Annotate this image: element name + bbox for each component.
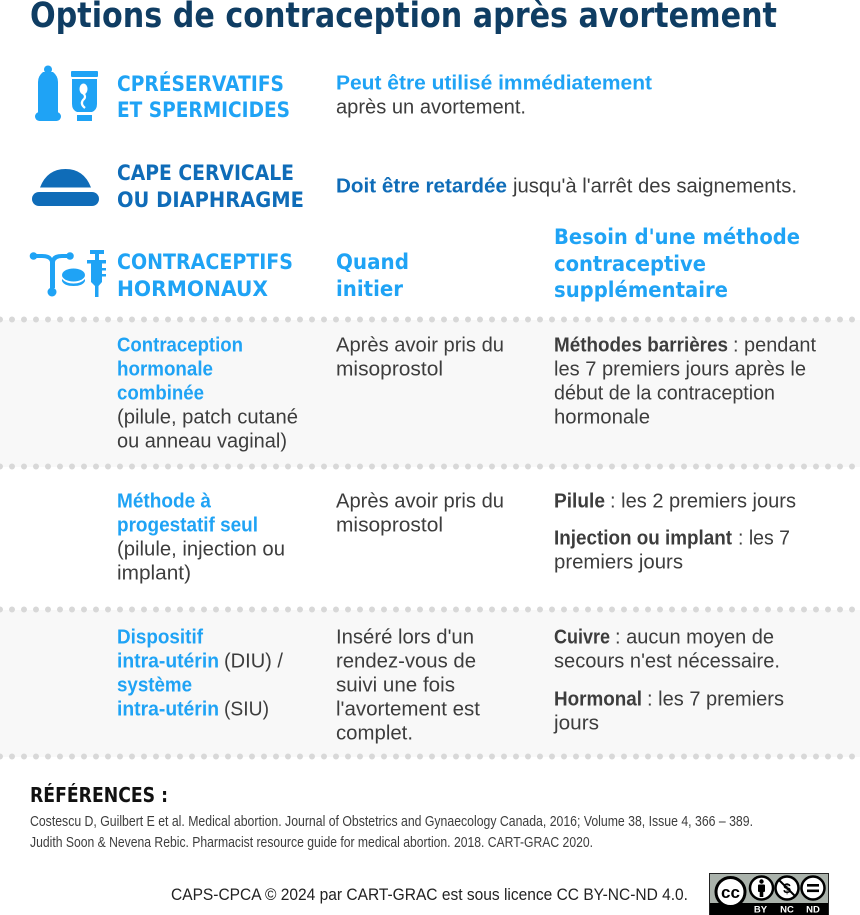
backup method <box>554 334 816 428</box>
when to start: misoprostol <box>336 358 443 380</box>
method name: hormonale <box>117 358 213 380</box>
when to start: Après avoir pris du <box>336 334 504 356</box>
backup method: premiers jours <box>554 552 683 574</box>
heading: hormonal contraceptives <box>117 250 293 302</box>
references list: Judith Soon & Nevena Rebic. Pharmacist resource guide for medical abortion. 2018. CART-GRAC 2020. <box>30 835 593 851</box>
column heading: when to start: Quand <box>336 250 409 275</box>
backup method <box>553 626 784 734</box>
backup method <box>554 490 796 574</box>
license text: CAPS-CPCA © 2024 par CART-GRAC est sous licence CC BY-NC-ND 4.0. <box>171 886 688 904</box>
when to start: rendez-vous de <box>336 650 476 672</box>
column heading: when to start <box>336 250 409 302</box>
backup method: jours <box>553 712 599 734</box>
method name: combinée <box>117 382 204 404</box>
when to start: misoprostol <box>336 514 443 536</box>
backup method: : pendant <box>733 334 816 356</box>
method name <box>117 626 283 720</box>
backup method: Pilule <box>554 490 605 512</box>
column heading: when to start: initier <box>336 277 403 302</box>
heading: hormonal contraceptives: CONTRACEPTIFS <box>117 250 293 275</box>
column heading: backup method: Besoin d'une méthode <box>554 225 800 250</box>
method name: ou anneau vaginal) <box>117 430 287 452</box>
heading: hormonal contraceptives: HORMONAUX <box>117 277 268 302</box>
when to start: complet. <box>336 722 413 744</box>
heading: condoms and spermicides: CPRÉSERVATIFS <box>117 71 284 97</box>
method name: intra-utérin <box>117 650 219 672</box>
column heading: backup method: contraceptive <box>554 252 706 277</box>
method name: implant) <box>117 562 191 584</box>
text: condoms timing <box>336 72 652 118</box>
text: cap timing: Doit être retardée <box>336 176 507 198</box>
backup method: hormonale <box>554 406 650 428</box>
backup method: Hormonal <box>554 688 642 710</box>
method name: (DIU) / <box>224 650 283 672</box>
backup method: début de la contraception <box>554 382 775 404</box>
method name: progestatif seul <box>117 514 258 536</box>
method name: Dispositif <box>117 626 203 648</box>
heading: cervical cap or diaphragm <box>117 161 304 213</box>
icon: CC BY-NC-ND badge <box>710 874 828 915</box>
text: cap timing: jusqu'à l'arrêt des saignements. <box>512 176 797 198</box>
row: progestin-only method <box>117 490 796 584</box>
method name <box>117 490 285 584</box>
text: condoms timing: après un avortement. <box>336 96 526 118</box>
method name: Méthode à <box>117 490 212 512</box>
method name: (pilule, patch cutané <box>117 406 298 428</box>
backup method: les 7 premiers jours après le <box>554 358 806 380</box>
references heading: RÉFÉRENCES : <box>30 782 168 807</box>
when to start <box>336 490 504 536</box>
icon: cervical cap <box>32 169 99 206</box>
column heading: backup method: supplémentaire <box>554 278 728 303</box>
text: condoms timing: Peut être utilisé immédiatement <box>336 72 652 94</box>
method name: (SIU) <box>224 698 269 720</box>
method name: Contraception <box>117 334 243 356</box>
when to start: Inséré lors d'un <box>336 626 474 648</box>
column heading: backup method <box>554 225 800 303</box>
heading: condoms and spermicides: ET SPERMICIDES <box>117 98 290 123</box>
icon: IUD, pill and syringe <box>30 250 106 297</box>
backup method: : les 7 <box>738 528 790 550</box>
references list <box>30 814 753 851</box>
row: IUD and IUS <box>117 626 784 744</box>
backup method: Cuivre <box>554 626 610 648</box>
icon: CC BY-NC-ND badge: cc <box>721 883 740 902</box>
when to start: l'avortement est <box>336 698 480 720</box>
when to start <box>336 626 480 744</box>
when to start <box>336 334 504 380</box>
method name: intra-utérin <box>117 698 219 720</box>
references list: Costescu D, Guilbert E et al. Medical abortion. Journal of Obstetrics and Gynaecology Canada, 2016; Volume 38, Issue 4, 366 – 389. <box>30 814 753 830</box>
method name <box>117 334 298 452</box>
when to start: suivi une fois <box>336 674 455 696</box>
heading: cervical cap or diaphragm: OU DIAPHRAGME <box>117 188 304 213</box>
backup method: secours n'est nécessaire. <box>554 650 780 672</box>
backup method: Injection ou implant <box>554 528 732 550</box>
backup method: : les 2 premiers jours <box>610 490 796 512</box>
when to start: Après avoir pris du <box>336 490 504 512</box>
backup method: : les 7 premiers <box>647 688 784 710</box>
icon: CC BY-NC-ND badge: $ <box>783 880 791 896</box>
text: cap timing <box>336 176 797 198</box>
method name: (pilule, injection ou <box>117 538 285 560</box>
icon: condom and spermicide tube <box>35 66 98 121</box>
heading: cervical cap or diaphragm: CAPE CERVICALE <box>117 161 294 186</box>
backup method: Méthodes barrières <box>554 334 728 356</box>
backup method: : aucun moyen de <box>615 626 774 648</box>
row: combined hormonal contraception <box>117 334 816 452</box>
method name: système <box>117 674 192 696</box>
heading: condoms and spermicides <box>117 71 290 123</box>
